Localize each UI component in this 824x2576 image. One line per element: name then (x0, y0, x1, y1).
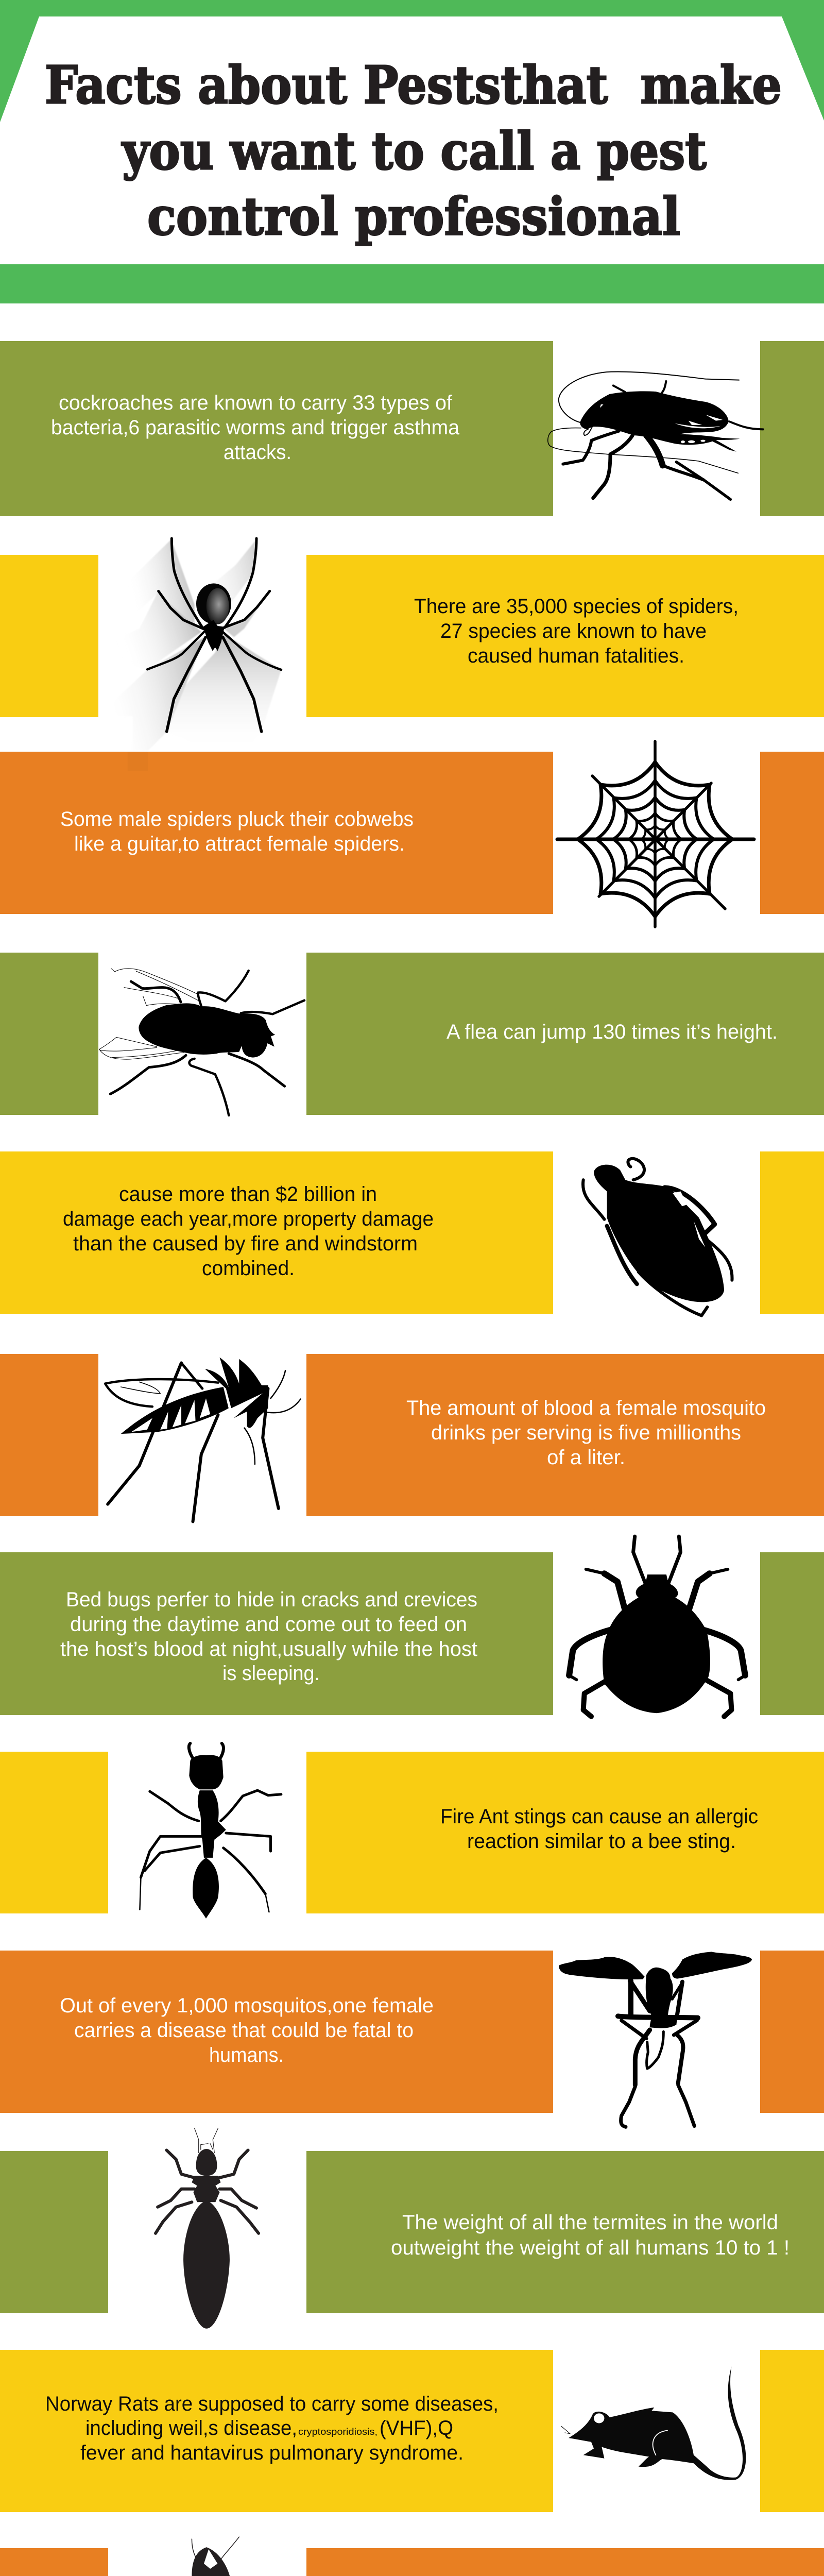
fact text: attacks. (224, 441, 291, 464)
fact text: The amount of blood a female mosquito (406, 1397, 766, 1419)
row 12: termite queen fact (0, 2548, 824, 2576)
fact text: (VHF),Q (380, 2417, 453, 2439)
row 5: damage fact (0, 1151, 824, 1314)
fact text (414, 595, 739, 667)
row 4: flea fact (0, 953, 824, 1115)
icon: spider web (557, 741, 754, 927)
row 8: fire ant fact (0, 1752, 824, 1913)
panel right (306, 2548, 824, 2576)
fact text: There are 35,000 species of spiders, (414, 595, 739, 618)
fact text (45, 2393, 499, 2464)
panel right (306, 1354, 824, 1516)
panel right (760, 752, 824, 914)
fact text: bacteria,6 parasitic worms and trigger asthma (51, 416, 460, 439)
row 3: cobweb fact (0, 752, 824, 914)
panel right (760, 341, 824, 516)
icon: fly (99, 969, 304, 1115)
icon: cockroach (548, 372, 763, 499)
panel right (306, 555, 824, 717)
row 11: Norway rats fact (0, 2350, 824, 2512)
row 2: spiders fact (0, 555, 824, 717)
fact text (60, 1994, 434, 2066)
fact text: The weight of all the termites in the world (402, 2211, 778, 2234)
fact text: Some male spiders pluck their cobwebs (60, 808, 414, 831)
fact text: cockroaches are known to carry 33 types of (59, 392, 453, 414)
panel right (760, 1151, 824, 1314)
fact text: is sleeping. (222, 1662, 320, 1685)
fact text: Out of every 1,000 mosquitos,one female (60, 1994, 434, 2017)
panel right (306, 2151, 824, 2313)
panel left (0, 1951, 553, 2113)
panel right (306, 1752, 824, 1913)
panel left (0, 2350, 553, 2512)
fact text: fever and hantavirus pulmonary syndrome. (80, 2442, 464, 2464)
row 9: mosquito disease fact (0, 1951, 824, 2113)
fact text: outweight the weight of all humans 10 to 1 ! (391, 2236, 789, 2259)
fact text (440, 1805, 758, 1853)
fact text: A flea can jump 130 times it’s height. (447, 1021, 778, 1043)
fact text: caused human fatalities. (468, 645, 684, 667)
icon: bed bug (569, 1536, 745, 1717)
fact text: the host’s blood at night,usually while the host (60, 1638, 477, 1660)
fact text: combined. (202, 1257, 295, 1280)
header panel (0, 0, 824, 303)
panel right (760, 2350, 824, 2512)
icon: mosquito (105, 1358, 301, 1521)
title: you want to call a pest (121, 121, 707, 181)
icon: flying mosquito (559, 1952, 752, 2127)
fact text: of a liter. (547, 1446, 625, 1469)
fact text: damage each year,more property damage (63, 1208, 434, 1230)
row 7: bed bugs fact (0, 1552, 824, 1715)
icon: spider (104, 538, 281, 771)
title (45, 55, 782, 247)
fact text (391, 2211, 789, 2259)
fact text: drinks per serving is five millionths (431, 1421, 741, 1444)
fact text: during the daytime and come out to feed on (70, 1613, 467, 1636)
fact text (406, 1397, 766, 1469)
panel left (0, 1552, 553, 1715)
row 6: mosquito blood fact (0, 1354, 824, 1516)
fact text: carries a disease that could be fatal to (74, 2019, 414, 2042)
icon: termite (156, 2128, 259, 2329)
icon: rat (561, 2366, 746, 2480)
fact text: Bed bugs perfer to hide in cracks and crevices (66, 1588, 477, 1611)
panel right (306, 953, 824, 1115)
header green band (0, 0, 824, 303)
fact text (51, 392, 460, 464)
panel left (0, 1151, 553, 1314)
panel left (0, 752, 553, 914)
fact text: like a guitar,to attract female spiders. (74, 833, 405, 855)
fact text: humans. (209, 2044, 284, 2066)
fact text: including weil,s disease, (85, 2417, 297, 2439)
fact text (63, 1183, 434, 1280)
fact text: reaction similar to a bee sting. (467, 1830, 736, 1853)
row 1: cockroach fact (0, 341, 824, 516)
fact text: Fire Ant stings can cause an allergic (440, 1805, 758, 1828)
panel left (0, 953, 98, 1115)
header white house shape (0, 16, 824, 264)
fact text: than the caused by fire and windstorm (73, 1232, 418, 1255)
panel left (0, 341, 553, 516)
title: control professional (147, 186, 680, 247)
spider shadow (104, 539, 281, 751)
panel left (0, 1752, 108, 1913)
panel right (760, 1951, 824, 2113)
row 10: termite weight fact (0, 2151, 824, 2313)
fact text: cause more than $2 billion in (119, 1183, 377, 1206)
panel left (0, 2151, 108, 2313)
panel right (760, 1552, 824, 1715)
panel left (0, 1354, 98, 1516)
fact text: 27 species are known to have (440, 620, 707, 642)
fact text: cryptosporidiosis, (298, 2427, 377, 2437)
spider body and legs (147, 538, 281, 732)
icon: ant (140, 1743, 281, 1919)
icon: beetle (583, 1159, 732, 1316)
panel left (0, 2548, 108, 2576)
panel left (0, 555, 98, 717)
fact text (60, 1588, 477, 1685)
icon: termite queen (160, 2537, 258, 2576)
fact text (60, 808, 414, 855)
fact text: Norway Rats are supposed to carry some diseases, (45, 2393, 499, 2415)
